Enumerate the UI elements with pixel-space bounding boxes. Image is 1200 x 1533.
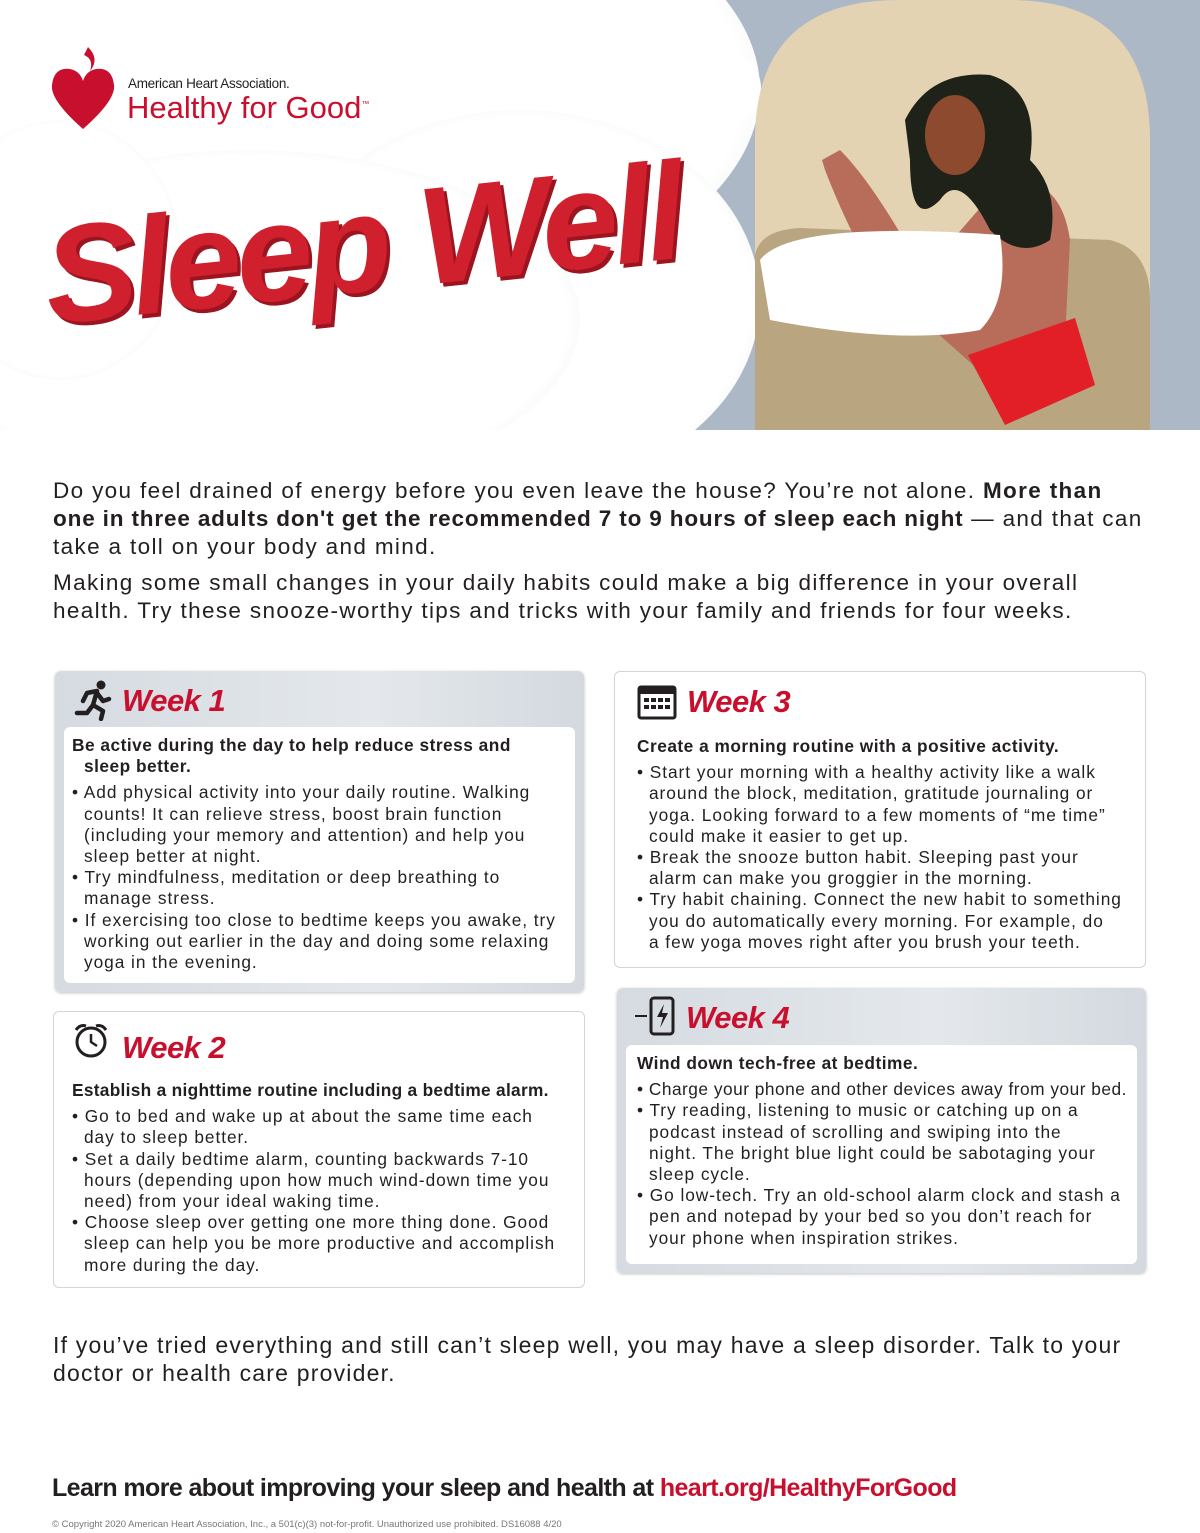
text week 4: • Charge your phone and other devices away from your bed. [637,1079,1127,1099]
icon: runner [74,680,112,721]
header illustration [0,0,1200,430]
panel: week 3 [614,671,1146,968]
intro text: Do you feel drained of energy before you even leave the house? You’re not alone. More than [53,478,1103,503]
text week 3: yoga. Looking forward to a few moments of “me time” [649,805,1106,825]
panel: week 1 [55,671,584,992]
text week 3: • Start your morning with a healthy activity like a walk • Break the snooze button habit. Sleeping past your • Try habit chaining. Connect the new habit to something [637,762,1122,909]
text week 4: night. The bright blue light could be sabotaging your [649,1143,1096,1163]
text week 4: Wind down tech-free at bedtime. [637,1053,918,1073]
text week 1: working out earlier in the day and doing some relaxing [84,931,549,951]
text week 1: yoga in the evening. [84,952,258,972]
text week 2: more during the day. [84,1255,260,1275]
text week 2: hours (depending upon how much wind-down time you [84,1170,549,1190]
text week 4: podcast instead of scrolling and swiping into the [649,1122,1062,1142]
text week 4: sleep cycle. [649,1164,751,1184]
icon: alarm clock [74,1024,108,1058]
text week 1: manage stress. [84,888,215,908]
text week 3: alarm can make you groggier in the morning. [649,868,1033,888]
text: health. Try these snooze-worthy tips and tricks with your family and friends for four weeks. [53,598,1073,623]
intro text: take a toll on your body and mind. [53,534,437,559]
text week 3 [637,736,1122,952]
text week 4: pen and notepad by your bed so you don’t reach for [649,1206,1092,1226]
text week 3: Create a morning routine with a positive activity. [637,736,1059,756]
beige arch [755,0,1150,430]
heading week 3: Week 3 [687,684,790,719]
closing text: doctor or health care provider. [53,1360,396,1386]
text week 2: need) from your ideal waking time. [84,1191,380,1211]
text week 2: Establish a nighttime routine including a bedtime alarm. [72,1080,549,1100]
text week 1: • Add physical activity into your daily routine. Walking • Try mindfulness, meditation or deep breathing to • If exercising too close to bedtime keeps you awake, try [72,782,556,930]
logo [52,47,369,129]
intro text [53,478,1143,559]
text week 1: counts! It can relieve stress, boost brain function [84,804,502,824]
cloud [0,0,760,490]
panel: week 2 [53,1011,585,1288]
text week 1: Be active during the day to help reduce stress and [72,735,511,755]
heading week 1: Week 1 [122,683,225,718]
text week 3: could make it easier to get up. [649,826,909,846]
icon: phone charging [635,996,674,1036]
panel: week 4 [617,988,1146,1273]
text week 2 [72,1080,555,1275]
text week 4 [637,1053,1127,1248]
text week 3: a few yoga moves right after you brush your teeth. [649,932,1081,952]
title: Sleep Well [37,134,687,354]
intro text: one in three adults don't get the recommended 7 to 9 hours of sleep each night — and that can [53,506,1143,531]
text week 2: • Go to bed and wake up at about the same time each • Set a daily bedtime alarm, counting backwards 7-10 • Choose sleep over getting one more thing done. Good [72,1106,549,1232]
text week 1: sleep better. [84,756,191,776]
woman [900,182,1070,385]
copyright: © Copyright 2020 American Heart Association, Inc., a 501(c)(3) not-for-profit. Unauthorized use prohibited. DS16088 4/20 [52,1519,562,1530]
closing text [53,1332,1121,1386]
text week 3: around the block, meditation, gratitude journaling or [649,783,1093,803]
text week 4: • Try reading, listening to music or catching up on a • Go low-tech. Try an old-school alarm clock and stash a [637,1100,1121,1205]
book [968,318,1095,425]
text week 2: sleep can help you be more productive and accomplish [84,1233,555,1253]
text week 4: your phone when inspiration strikes. [649,1228,959,1248]
logo: Healthy for Good™ [127,90,369,125]
heading week 4: Week 4 [686,1000,789,1035]
logo: American Heart Association. [128,76,289,91]
heading week 2: Week 2 [122,1030,225,1065]
icon: calendar [638,686,676,720]
text week 1: (including your memory and attention) and help you [84,825,525,845]
text week 1 [72,735,556,972]
text week 2: day to sleep better. [84,1127,249,1147]
closing text: If you’ve tried everything and still can’t sleep well, you may have a sleep disorder. Talk to your [53,1332,1121,1358]
call to action: Learn more about improving your sleep and health at heart.org/HealthyForGood [52,1474,957,1502]
text: Making some small changes in your daily habits could make a big difference in your overall [53,570,1078,595]
text week 3: you do automatically every morning. For example, do [649,911,1104,931]
text week 1: sleep better at night. [84,846,262,866]
